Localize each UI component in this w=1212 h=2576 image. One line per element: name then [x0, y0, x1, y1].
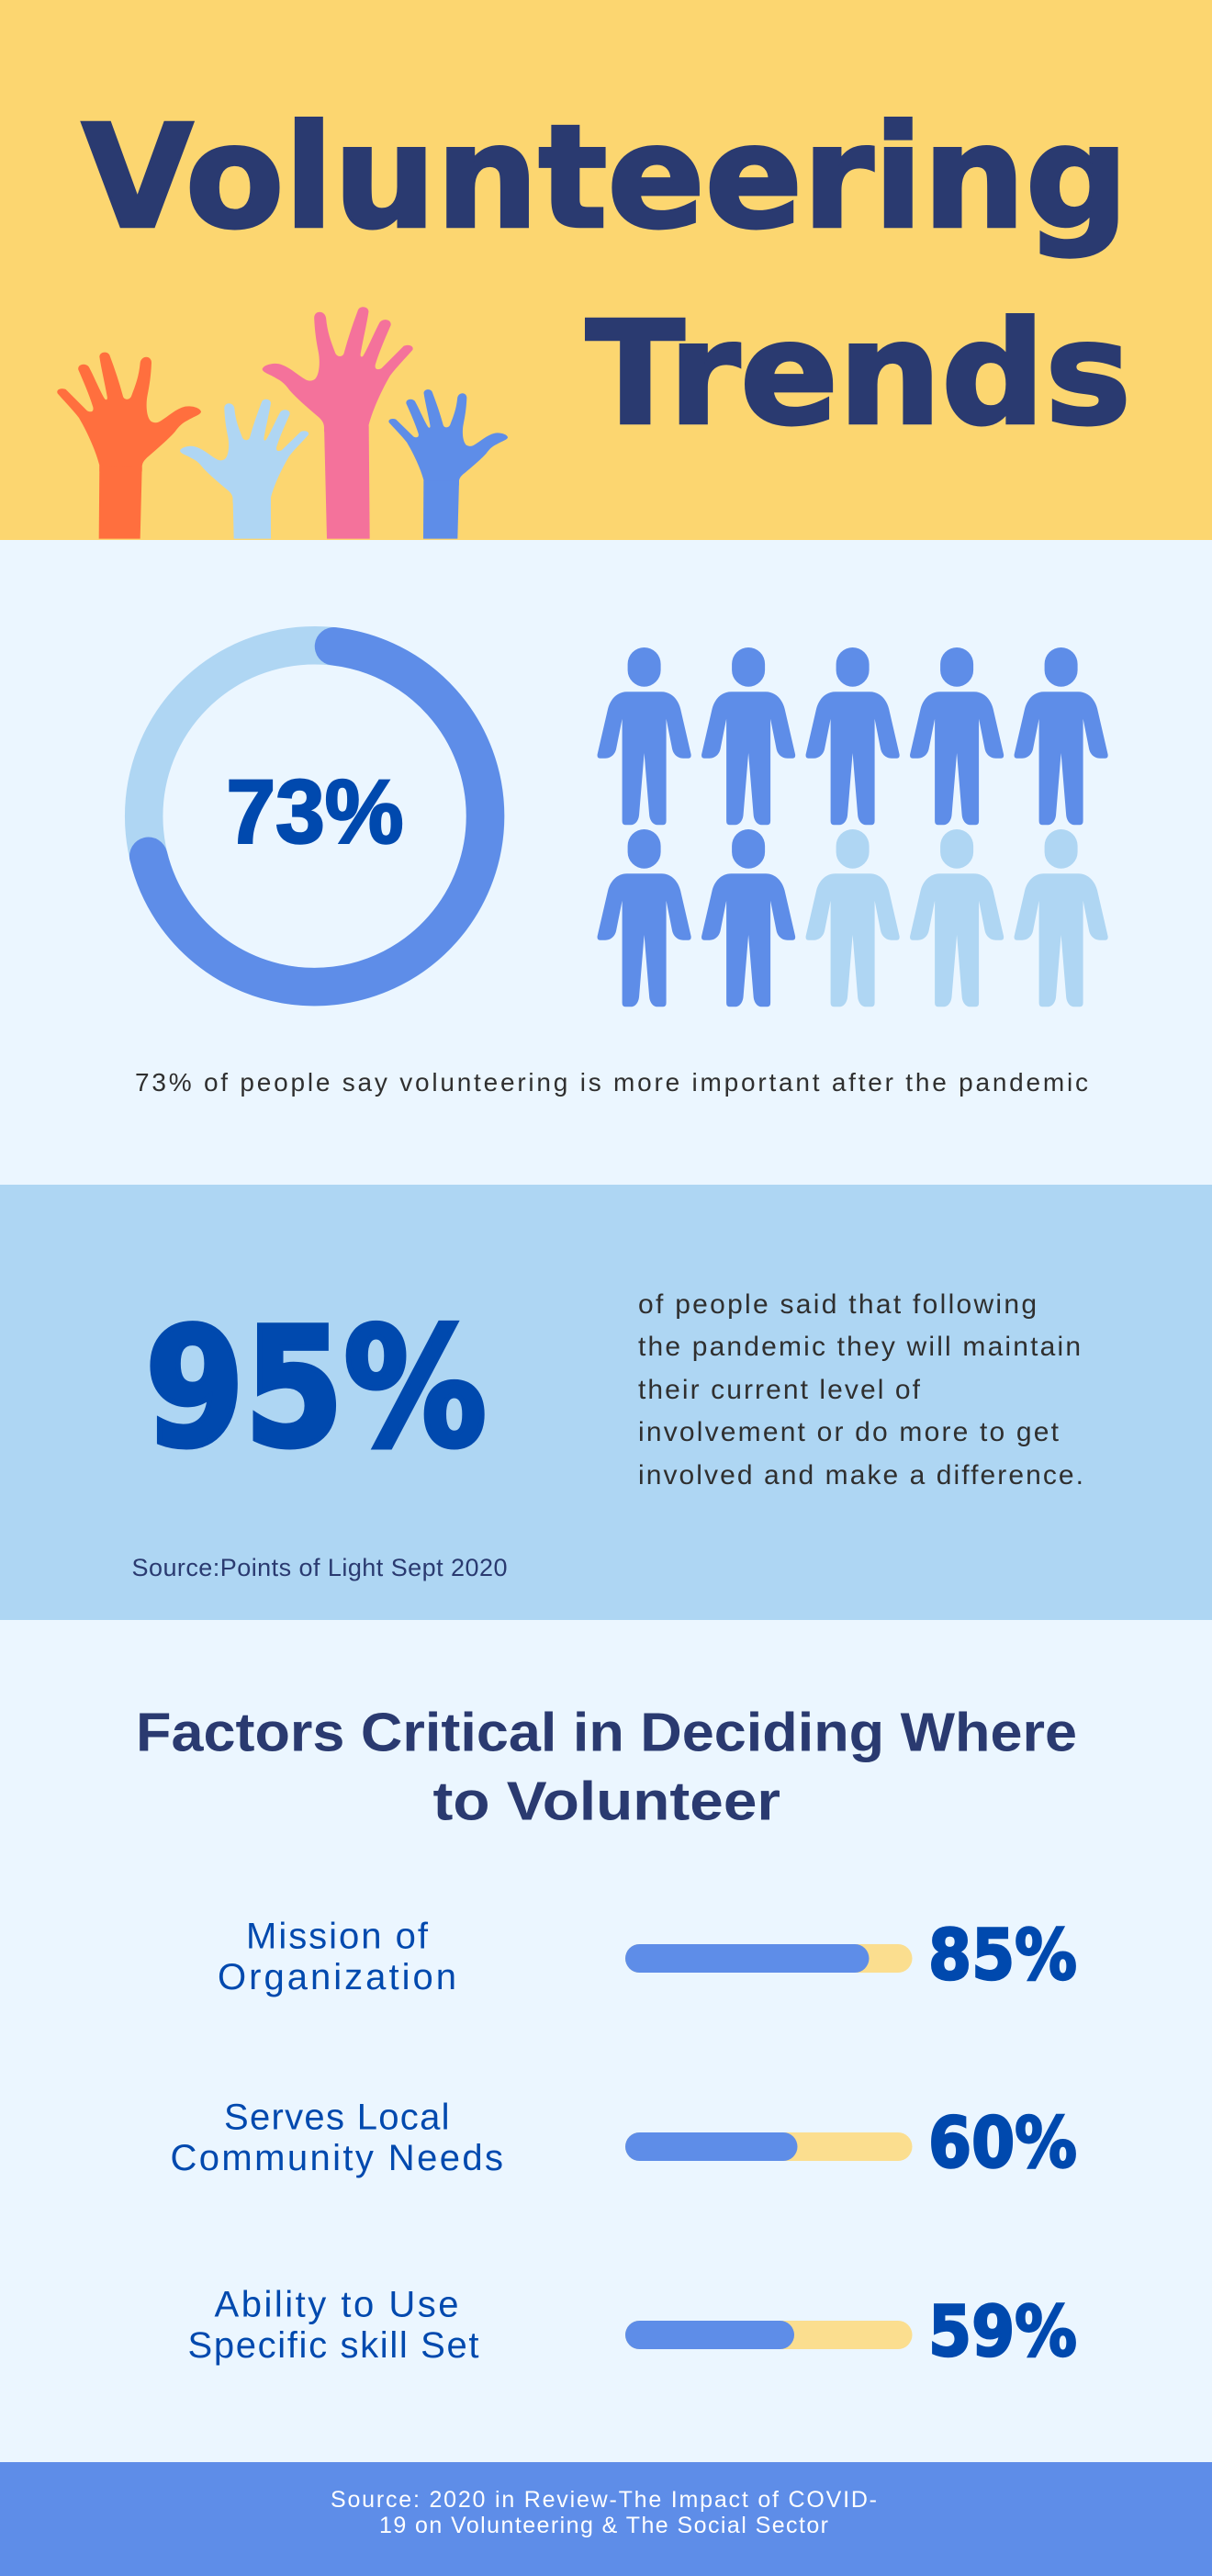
icon: light blue hand	[180, 399, 309, 539]
heading	[136, 1703, 1077, 1832]
progress bar 60	[625, 2132, 913, 2161]
description text	[638, 1289, 1083, 1490]
label: Serves Local	[224, 2098, 450, 2138]
progress bar 85	[625, 1944, 913, 1973]
caption: 73% of people say volunteering is more important after the pandemic	[135, 1068, 1088, 1097]
icon: blue hand	[388, 389, 508, 539]
footer text	[331, 2487, 877, 2538]
description text: of people said that following	[638, 1289, 1037, 1320]
value: 59%	[928, 2290, 1077, 2372]
factor row: community	[171, 2098, 1077, 2184]
label	[218, 1916, 456, 1997]
description text: involved and make a difference.	[638, 1460, 1083, 1490]
icon: pink hand	[263, 307, 413, 539]
label	[187, 2285, 479, 2366]
big number: 95%	[145, 1293, 487, 1483]
label	[171, 2098, 503, 2178]
footer text: Source: 2020 in Review-The Impact of COVID-	[331, 2487, 877, 2513]
title: Volunteering	[82, 94, 1128, 261]
pictogram: 7 of 10 people	[598, 647, 1108, 1007]
value: 85%	[928, 1914, 1077, 1996]
description text: their current level of	[638, 1375, 921, 1405]
label: Mission of	[246, 1916, 429, 1956]
title	[82, 94, 1131, 457]
heading: to Volunteer	[433, 1772, 780, 1832]
panel: 73 percent statistic	[0, 540, 1212, 1185]
icon: orange hand	[57, 353, 201, 539]
description text: involvement or do more to get	[638, 1417, 1060, 1447]
description text: the pandemic they will maintain	[638, 1332, 1081, 1362]
factor row: skills	[187, 2285, 1077, 2372]
panel: footer source	[0, 2462, 1212, 2576]
panel: critical factors	[0, 1620, 1212, 2462]
panel: 95 percent statistic	[0, 1185, 1212, 1620]
label: Ability to Use	[215, 2285, 459, 2325]
label: Organization	[218, 1957, 456, 1997]
footer text: 19 on Volunteering & The Social Sector	[379, 2513, 828, 2538]
panel: header	[0, 0, 1212, 540]
progress bar 59	[625, 2321, 913, 2349]
heading: Factors Critical in Deciding Where	[136, 1703, 1077, 1763]
value: 60%	[928, 2102, 1077, 2184]
label: Specific skill Set	[187, 2325, 479, 2366]
icon: raised hands	[57, 307, 508, 539]
title: Trends	[586, 290, 1131, 457]
source note: Source:Points of Light Sept 2020	[132, 1554, 507, 1581]
donut chart	[144, 646, 486, 987]
label: Community Needs	[171, 2138, 503, 2178]
donut value: 73%	[226, 761, 404, 862]
factor row: mission	[218, 1914, 1077, 1997]
